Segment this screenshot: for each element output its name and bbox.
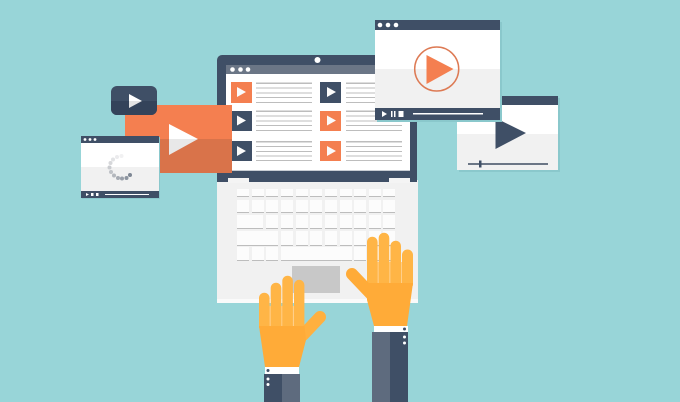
cuff <box>265 367 299 374</box>
play icon <box>415 47 459 91</box>
orange video panel <box>125 105 232 173</box>
palm <box>367 283 413 326</box>
control bar <box>375 108 500 120</box>
fingers <box>367 233 413 285</box>
video list <box>231 82 402 161</box>
window: right player <box>457 96 560 172</box>
control bar <box>81 191 159 198</box>
hinges <box>228 178 410 183</box>
sleeve <box>264 374 300 402</box>
right hand <box>352 233 413 402</box>
camera <box>314 57 320 63</box>
text lines <box>256 82 402 161</box>
finger webbing <box>260 306 304 328</box>
dark play button <box>111 86 157 115</box>
sleeve <box>372 332 408 402</box>
slider <box>468 160 548 168</box>
window: top player <box>375 20 502 122</box>
finger webbing <box>368 262 413 286</box>
thumb <box>352 274 371 294</box>
left hand <box>259 276 320 402</box>
window: loading <box>81 136 160 199</box>
screen <box>226 65 410 171</box>
cuff <box>374 326 408 332</box>
palm <box>259 326 306 367</box>
thumbnail tiles <box>231 82 341 161</box>
laptop lid <box>217 55 417 182</box>
touchpad <box>292 266 340 293</box>
laptop base <box>217 180 418 303</box>
laptop <box>217 55 418 303</box>
play icon <box>496 118 526 149</box>
fingers <box>259 276 304 328</box>
thumb <box>303 317 320 335</box>
loading spinner <box>108 154 132 180</box>
keyboard <box>237 189 395 261</box>
